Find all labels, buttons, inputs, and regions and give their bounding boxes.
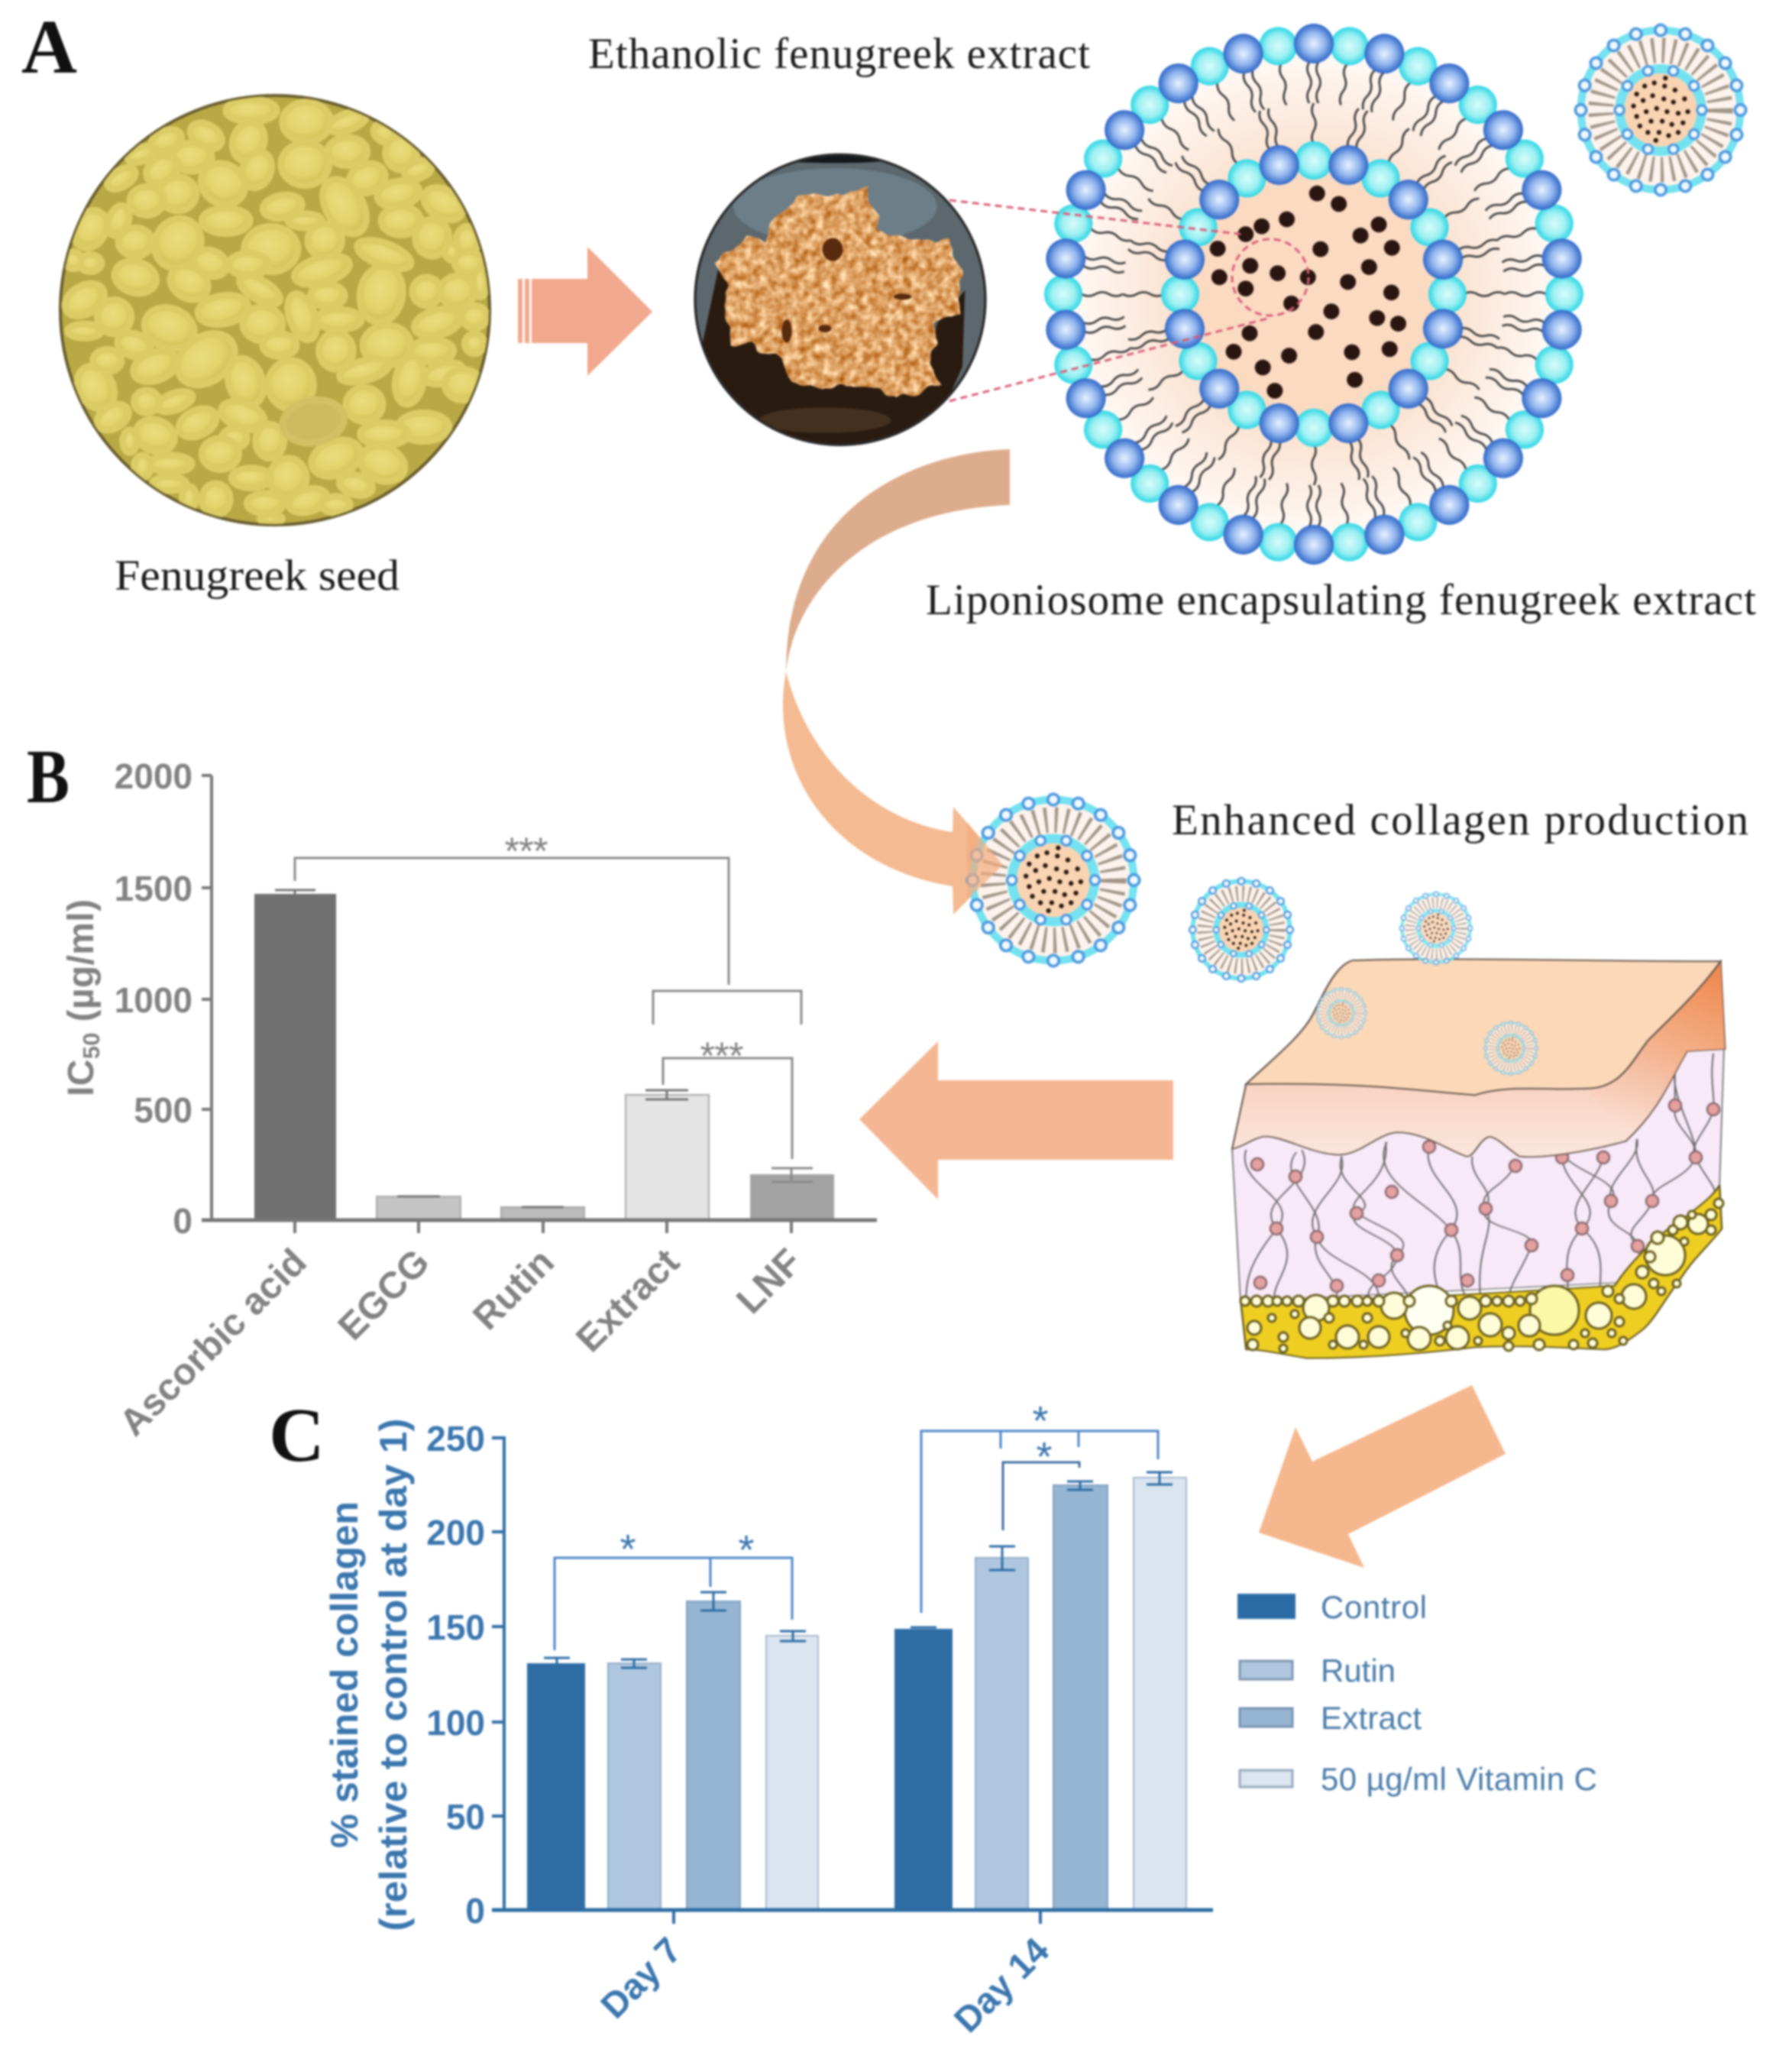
- y axis tick labels: 2000: [115, 756, 192, 796]
- significance stars: *: [738, 1527, 755, 1573]
- y axis title line 2: (relative to control at day 1): [372, 1418, 415, 1931]
- liposome penetrating skin, left: [1316, 988, 1367, 1038]
- epidermis layer: [1232, 961, 1725, 1157]
- epidermis corner shading: [1587, 961, 1725, 1141]
- y axis tick labels: 500: [134, 1090, 192, 1130]
- bar: rutin: [501, 1207, 584, 1220]
- x axis labels: Ascorbic acid: [112, 1242, 315, 1444]
- x axis labels: LNF: [729, 1242, 810, 1322]
- x axis labels: Day 14: [946, 1930, 1056, 2040]
- significance stars: *: [1032, 1398, 1049, 1444]
- x axis labels: Rutin: [465, 1242, 562, 1338]
- stratum corneum top surface: [1246, 959, 1721, 1095]
- fat cells: [1240, 1199, 1723, 1352]
- y axis tick labels: 0: [465, 1891, 485, 1931]
- error bars: [275, 890, 813, 1207]
- x axis labels: EGCG: [331, 1242, 438, 1348]
- x axis labels: Extract: [568, 1242, 687, 1360]
- caption: fenugreek seed: Fenugreek seed: [115, 552, 399, 600]
- x axis labels: [112, 1242, 810, 1444]
- panel letter C: C: [269, 1392, 325, 1478]
- title: ethanolic fenugreek extract: Ethanolic fenugreek extract: [588, 30, 1090, 78]
- y axis tick labels: 0: [173, 1201, 192, 1241]
- legend for chart C: [1237, 1589, 1597, 1797]
- outer lipid ring: [1043, 24, 1584, 565]
- significance brackets: [295, 858, 801, 1159]
- curved arrow: upper tan segment: [786, 449, 1010, 672]
- diagram: liponiosome: [1043, 24, 1584, 565]
- significance stars: *: [619, 1526, 636, 1572]
- curved arrow: lower peach segment with head: [783, 672, 1003, 915]
- bar chart C: stained collagen: [323, 1398, 1213, 2040]
- y axis tick labels: 1500: [115, 869, 192, 908]
- legend: control: [1237, 1589, 1427, 1625]
- liposome approaching skin: [1189, 878, 1293, 982]
- heading: enhanced collagen production: Enhanced collagen production: [1172, 796, 1748, 844]
- significance stars: [619, 1398, 1053, 1573]
- photo: fenugreek seeds: [59, 96, 490, 525]
- bars day 7: [527, 1601, 818, 1910]
- y axis title line 1: % stained collagen: [323, 1501, 366, 1848]
- liposome penetrating skin, right: [1483, 1021, 1538, 1076]
- arrow: skin to chart B: [859, 1041, 1173, 1199]
- legend: rutin: [1240, 1653, 1396, 1688]
- legend: control: Control: [1321, 1589, 1427, 1625]
- bar: extract: [626, 1095, 709, 1220]
- y axis tick labels: 150: [426, 1607, 485, 1647]
- legend: extract: [1240, 1700, 1422, 1736]
- error bars: [544, 1472, 1173, 1668]
- significance stars: *: [1036, 1434, 1053, 1480]
- significance brackets: [555, 1431, 1158, 1650]
- arrow: skin to chart C: [1259, 1385, 1506, 1568]
- y axis tick labels: 100: [426, 1703, 485, 1743]
- bar: EGCG: [377, 1196, 461, 1220]
- axes: [492, 1436, 1213, 1924]
- y axis tick labels: 200: [426, 1513, 485, 1552]
- dermis: [1232, 1049, 1724, 1301]
- y axis title: (µg/ml): [61, 899, 102, 1032]
- bar chart B: IC50: [61, 756, 877, 1444]
- liponiosome at arrow head: [967, 794, 1140, 966]
- panel letter A: A: [21, 4, 77, 89]
- bars day 14: [894, 1478, 1186, 1910]
- y axis title: 50: [78, 1032, 105, 1059]
- y axis title: IC: [61, 1060, 102, 1096]
- liposome on skin surface: [1399, 892, 1473, 965]
- y axis tick labels: 50: [446, 1797, 485, 1837]
- small liponiosome, top right: [1575, 24, 1746, 196]
- caption: liponiosome encapsulating fenugreek extract: Liponiosome encapsulating fenugreek extract: [926, 576, 1756, 624]
- significance stars, lower: ***: [700, 1034, 744, 1077]
- arrow head overlay: [967, 822, 1003, 900]
- y axis tick labels: 250: [426, 1419, 485, 1458]
- subcutaneous fat layer: [1240, 1185, 1722, 1358]
- photo: extract in dish: [695, 128, 985, 447]
- red dashed zoom lines and circle: [949, 200, 1308, 401]
- panel letter B: B: [27, 733, 70, 819]
- significance stars, top: ***: [504, 830, 548, 872]
- x axis labels: [593, 1930, 1056, 2040]
- collagen network: [1245, 1054, 1715, 1299]
- legend: rutin: Rutin: [1321, 1653, 1396, 1688]
- diagram: skin cross-section: [1232, 959, 1725, 1358]
- x axis labels: Day 7: [593, 1930, 689, 2026]
- bar: LNF: [750, 1174, 834, 1220]
- arrow: seed to extract: [518, 247, 652, 376]
- legend: extract: Extract: [1321, 1700, 1422, 1736]
- y axis tick labels: [426, 1419, 485, 1931]
- y axis tick labels: 1000: [115, 980, 192, 1020]
- inner lipid ring: [1123, 103, 1505, 485]
- y axis tick labels: [115, 756, 192, 1241]
- extract particles in liposome core: [1210, 186, 1406, 399]
- collagen nodes: [1251, 1099, 1719, 1292]
- bar: ascorbic acid: [254, 894, 336, 1220]
- axes: [202, 775, 877, 1233]
- legend: vitamin C: 50 µg/ml Vitamin C: [1321, 1761, 1597, 1797]
